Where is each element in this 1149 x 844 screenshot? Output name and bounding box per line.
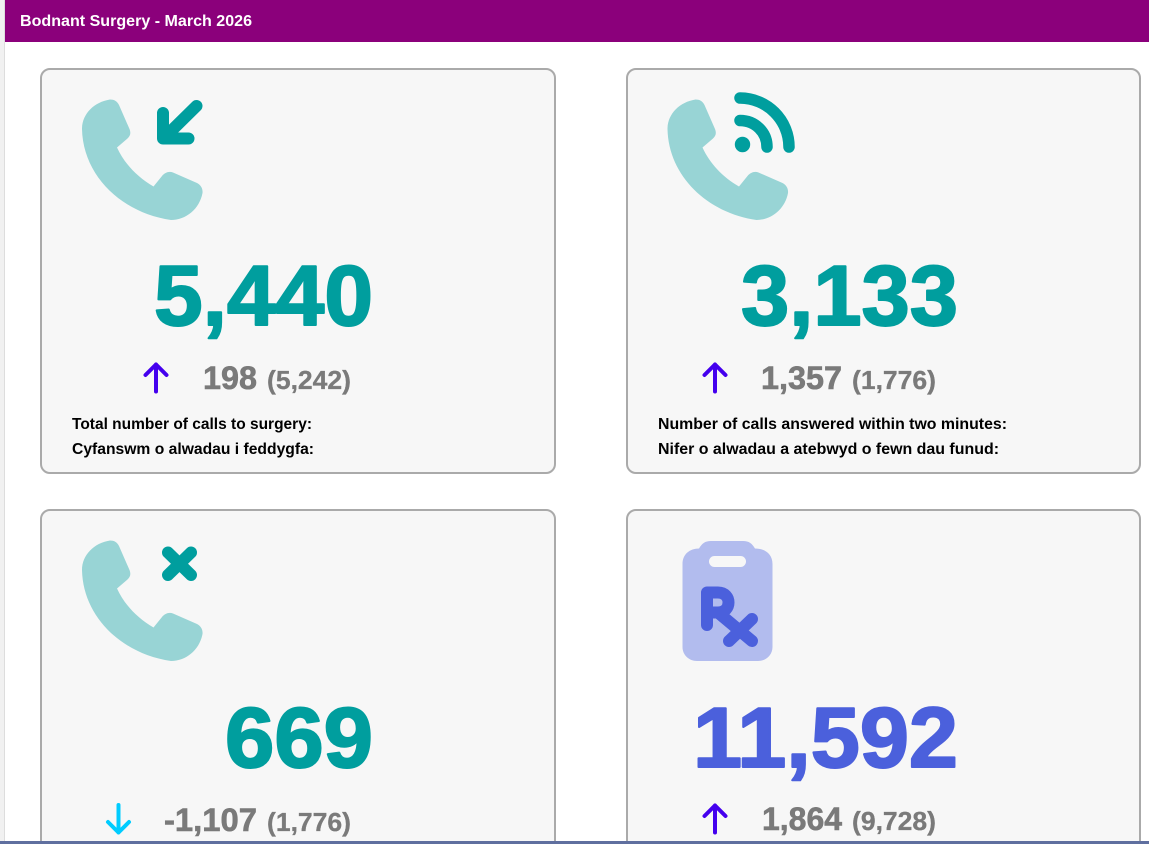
missed calls number: 669: [225, 691, 373, 786]
change value: 198: [203, 360, 257, 396]
prescriptions number: 11,592: [693, 691, 958, 786]
icon: up arrow: [146, 364, 166, 392]
icon: up arrow: [704, 806, 726, 832]
description Welsh: Cyfanswm o alwadau i feddygfa:: [72, 441, 314, 458]
previous value: (1,776): [267, 807, 351, 837]
icon: prescription clipboard: [682, 541, 772, 661]
panel: calls answered: [627, 69, 1140, 473]
change value: -1,107: [164, 802, 257, 838]
change value: 1,864: [762, 801, 842, 837]
icon: incoming call: [82, 100, 203, 220]
panel: missed calls: [41, 510, 555, 844]
previous value: (5,242): [267, 365, 351, 395]
description Welsh: Nifer o alwadau a atebwyd o fewn dau funud:: [658, 441, 999, 458]
panel: total calls: [41, 69, 555, 473]
description English: Total number of calls to surgery:: [72, 416, 312, 433]
header bar: [5, 0, 1149, 42]
calls answered number: 3,133: [741, 249, 958, 344]
icon: call with signal: [668, 98, 789, 220]
previous value: (9,728): [852, 806, 936, 836]
header title: Bodnant Surgery - March 2026: [20, 13, 252, 30]
panel: prescriptions: [627, 510, 1140, 844]
icon: up arrow: [704, 364, 726, 392]
total calls number: 5,440: [154, 249, 373, 344]
icon: down arrow: [108, 805, 129, 832]
icon: missed call: [82, 540, 203, 661]
change value: 1,357: [761, 360, 842, 396]
description English: Number of calls answered within two minutes:: [658, 416, 1007, 433]
previous value: (1,776): [852, 365, 936, 395]
